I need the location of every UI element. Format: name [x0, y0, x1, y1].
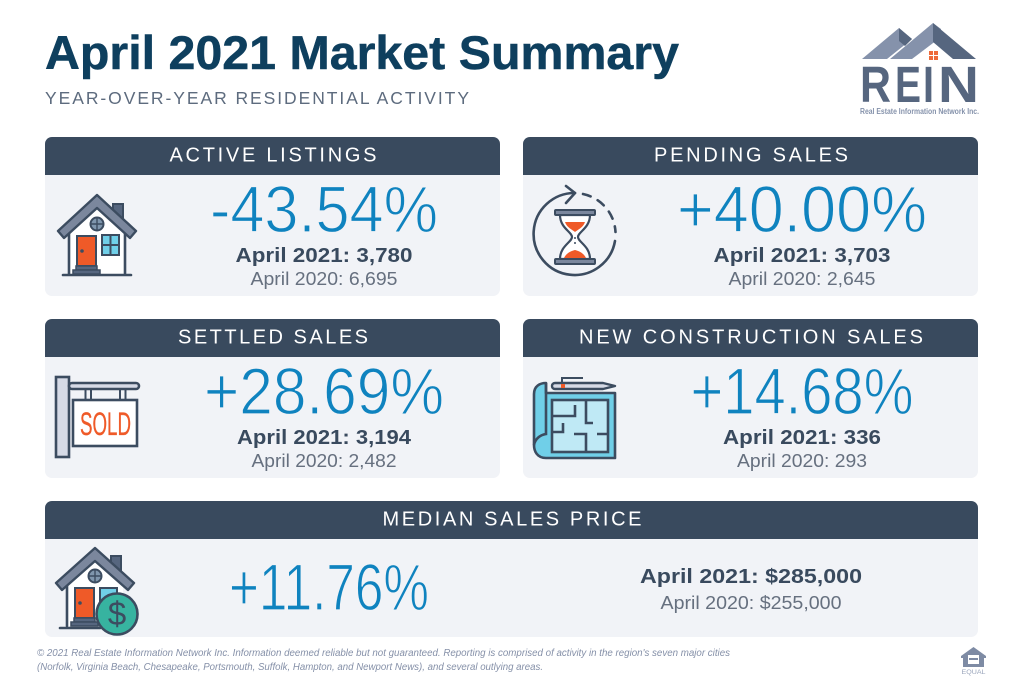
title: April 2021 Market Summary: [45, 26, 679, 79]
panel: median sales price: [45, 501, 978, 637]
footer disclaimer: © 2021 Real Estate Information Network Inc. Information deemed reliable but not guaranteed. Reporting is comprised of activity in the region's seven major cities: [37, 648, 730, 659]
heading: pending sales: PENDING SALES: [654, 144, 848, 166]
logo: REIN: Real Estate Information Network Inc.: [860, 107, 979, 116]
panel: new construction sales: [523, 319, 978, 478]
april 2021 value: April 2021: 3,194: [237, 427, 412, 449]
logo: REIN: R: [860, 56, 891, 113]
logo: REIN: I: [923, 56, 934, 113]
percent change: -43.54%: [210, 172, 438, 246]
icon: floor plan and pen: [534, 378, 615, 458]
logo: REIN: [860, 23, 979, 116]
heading: settled sales: SETTLED SALES: [178, 326, 368, 348]
icon: house with dollar coin: $: [108, 595, 126, 632]
percent change: +11.76%: [229, 550, 429, 624]
percent change: +40.00%: [677, 172, 927, 246]
panel: pending sales: [523, 137, 978, 296]
panel: settled sales: [45, 319, 500, 478]
icon: sold sign: [56, 377, 139, 457]
april 2020 value: April 2020: 6,695: [250, 269, 398, 289]
subtitle: YEAR-OVER-YEAR RESIDENTIAL ACTIVITY: [45, 88, 469, 108]
logo: REIN: E: [895, 56, 921, 113]
heading: median sales price: MEDIAN SALES PRICE: [382, 508, 642, 530]
heading: new construction sales: NEW CONSTRUCTION SALES: [579, 326, 923, 348]
icon: equal housing: EQUAL: [962, 670, 986, 676]
icon: hourglass: [534, 186, 616, 275]
icon: equal housing: [961, 647, 986, 676]
april 2020 value: April 2020: 2,482: [252, 451, 396, 471]
april 2020 value: April 2020: 293: [737, 451, 867, 471]
percent change: +14.68%: [690, 354, 914, 428]
percent change: +28.69%: [204, 354, 444, 428]
april 2020 value: April 2020: $255,000: [660, 593, 842, 613]
april 2021 value: April 2021: 3,703: [714, 245, 890, 267]
heading: active listings: ACTIVE LISTINGS: [170, 144, 376, 166]
footer disclaimer: [37, 648, 730, 673]
april 2021 value: April 2021: 3,780: [236, 245, 412, 267]
icon: house: [58, 195, 136, 275]
icon: house with dollar coin: [56, 548, 138, 634]
logo: REIN: N: [938, 56, 979, 113]
footer disclaimer: (Norfolk, Virginia Beach, Chesapeake, Portsmouth, Suffolk, Hampton, and Newport News), and several outlying areas.: [37, 662, 543, 673]
panel: active listings: [45, 137, 500, 296]
icon: sold sign: SOLD: [80, 406, 131, 442]
april 2021 value: April 2021: 336: [723, 427, 881, 449]
april 2020 value: April 2020: 2,645: [728, 269, 876, 289]
april 2021 value: April 2021: $285,000: [640, 566, 862, 588]
